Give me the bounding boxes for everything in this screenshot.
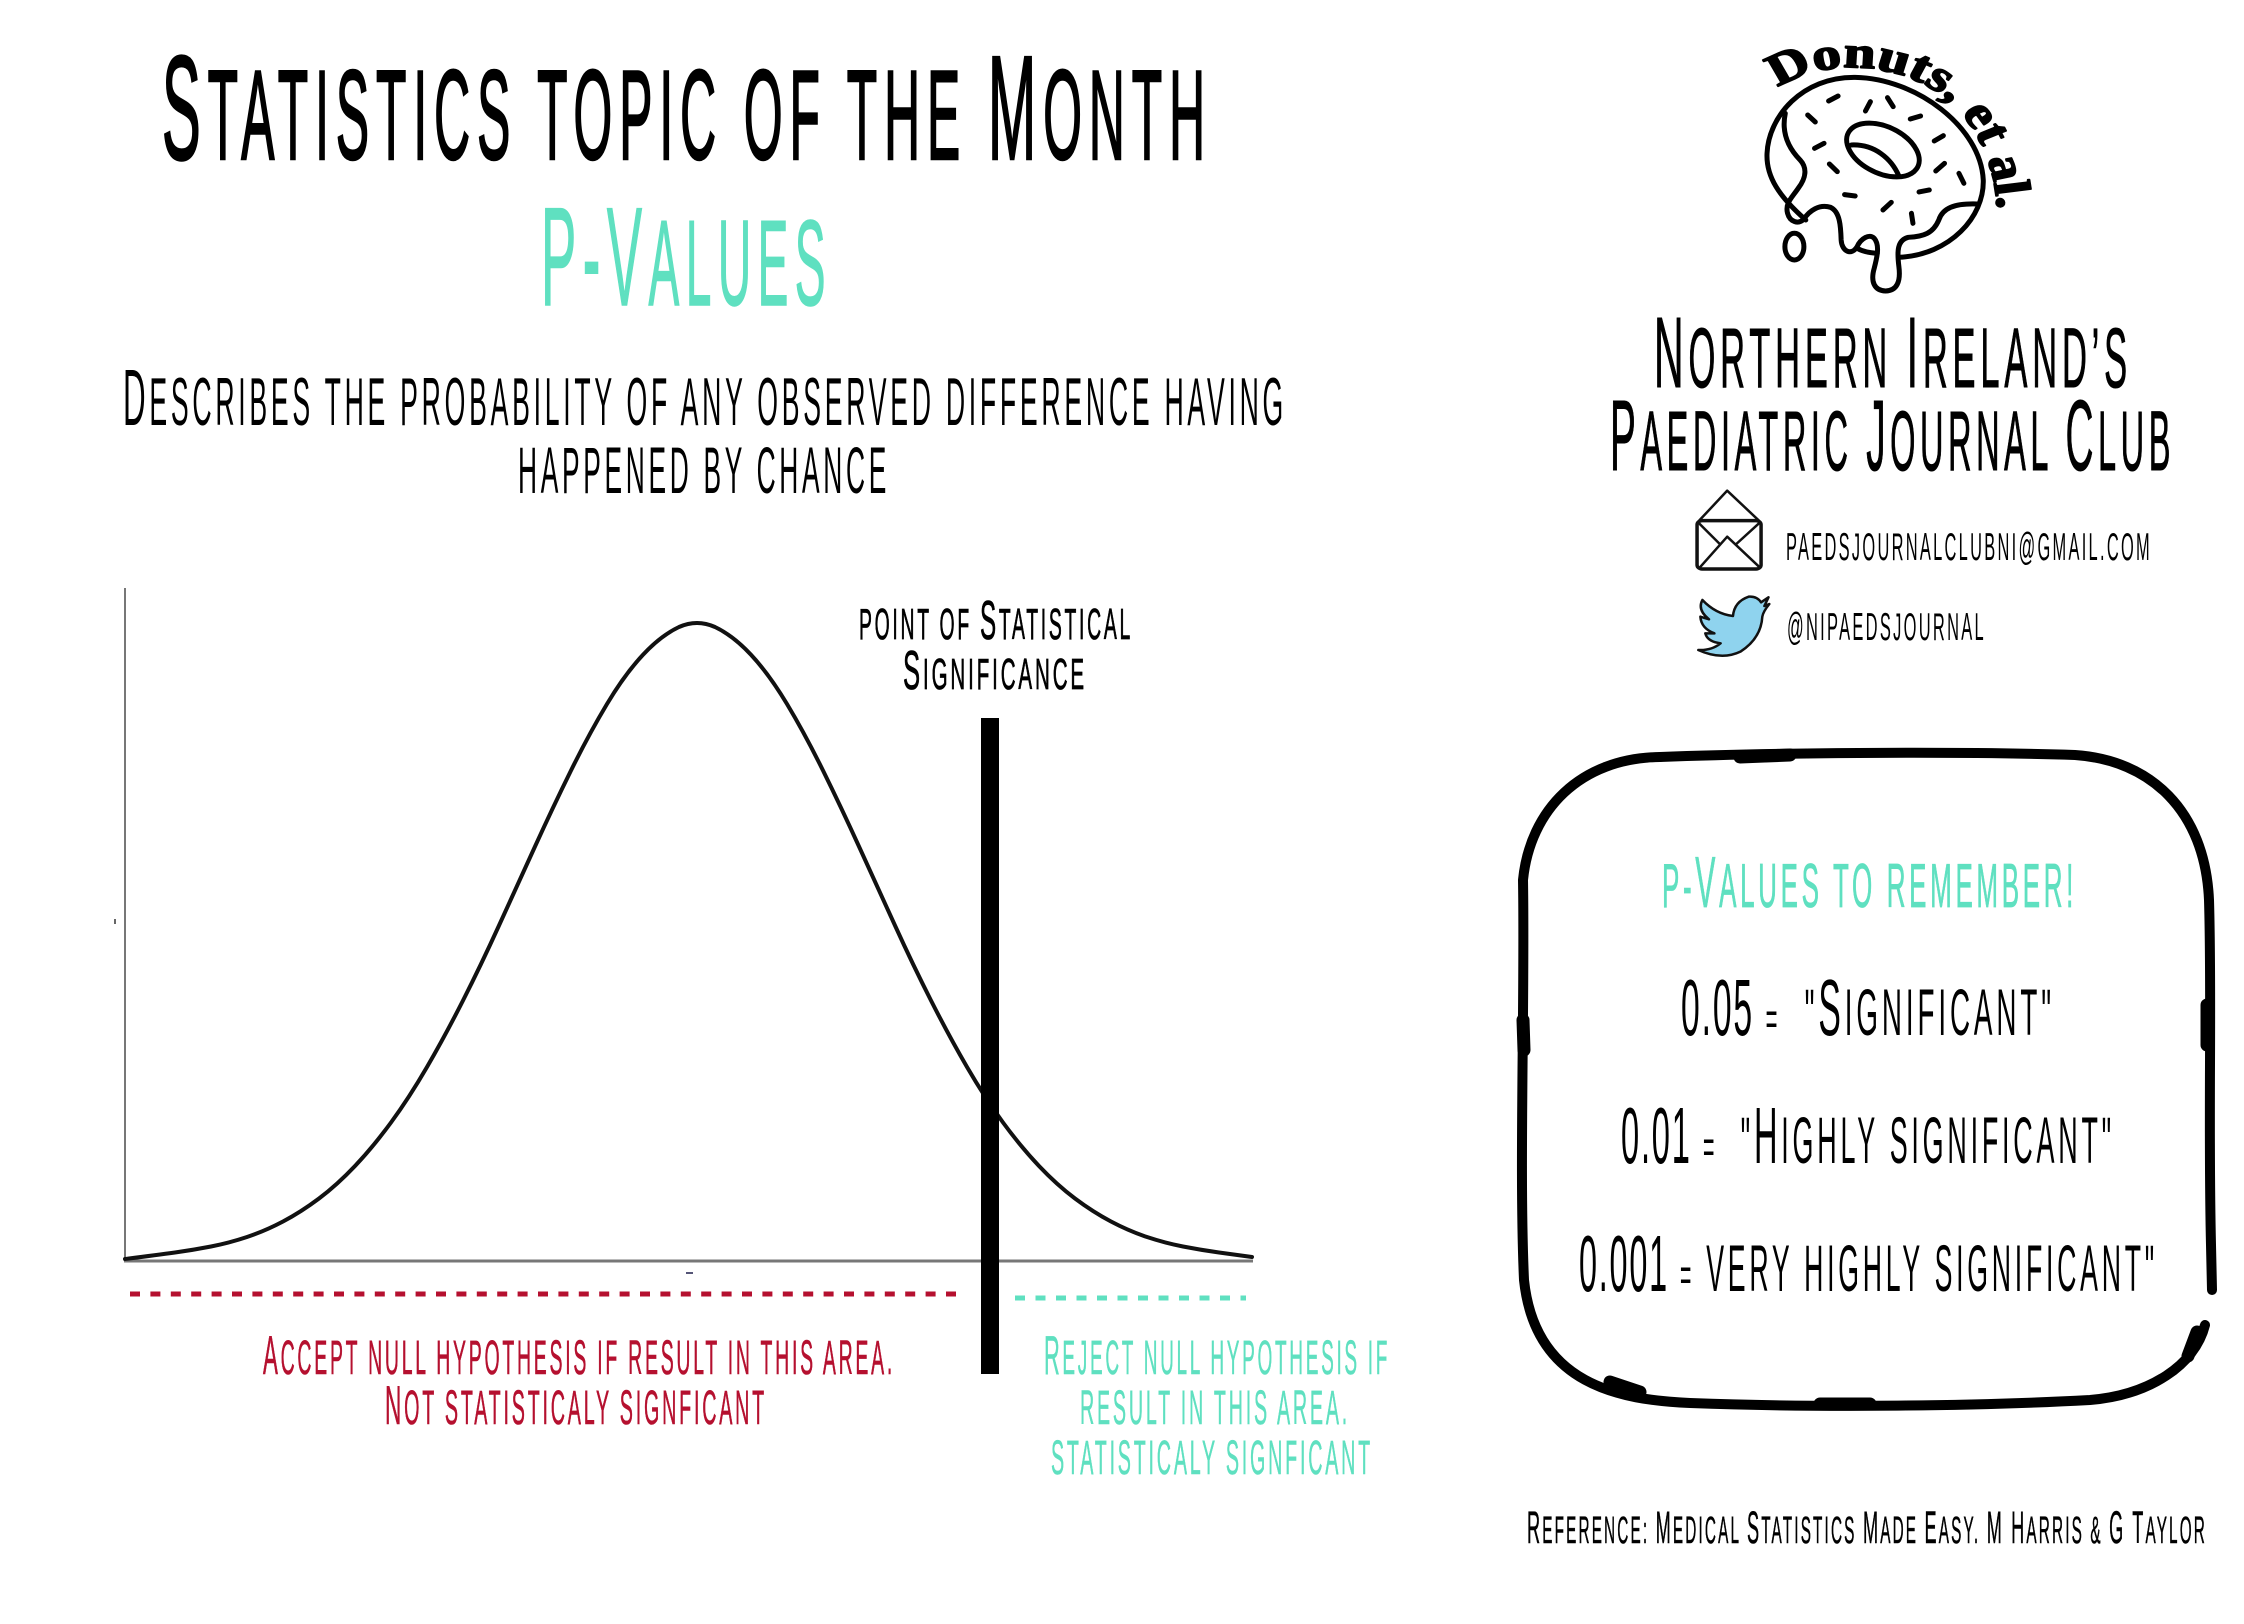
dashed line: acceptance region <box>130 1292 960 1296</box>
label: accept null hypothesis: NOT STATISTICALY SIGNFICANT <box>385 1374 767 1436</box>
text: P-VALUES <box>541 178 832 335</box>
chart: normal distribution curve: ACCEPT NULL HYPOTHESIS IF RESULT IN THIS AREA. <box>263 1324 895 1386</box>
logo drop <box>1785 233 1804 260</box>
label: point of statistical significance <box>859 589 1133 701</box>
logo: Donuts, et al. <box>1762 46 2032 294</box>
text block: definition <box>123 353 1287 507</box>
text: STATISTICALY SIGNFICANT <box>1051 1432 1373 1485</box>
bell curve <box>125 623 1252 1259</box>
title: STATISTICS TOPIC OF THE MONTH <box>162 26 1212 191</box>
panel: p-values to remember <box>1522 753 2212 1406</box>
label: point of statistical significance: SIGNIFICANCE <box>903 639 1087 701</box>
text: REJECT NULL HYPOTHESIS IF <box>1044 1324 1390 1386</box>
label: point of statistical significance: POINT OF STATISTICAL <box>859 589 1133 651</box>
logo donut hole <box>1835 112 1930 188</box>
heading: Northern Ireland's Paediatric Journal Club <box>1610 297 2175 492</box>
significance threshold bar <box>981 718 999 1374</box>
logo text: Donuts, et al. <box>1762 46 2032 208</box>
icon: envelope <box>1697 491 1761 569</box>
icon: twitter bird <box>1698 597 1769 656</box>
chart: normal distribution curve <box>114 588 1390 1485</box>
logo arc path <box>1778 67 1998 217</box>
logo donut outline <box>1767 77 1983 257</box>
logo glaze with drips <box>1784 113 1977 291</box>
label: reject null hypothesis <box>1044 1324 1390 1485</box>
label: accept null hypothesis <box>263 1324 895 1436</box>
text: RESULT IN THIS AREA. <box>1080 1382 1350 1435</box>
panel hand-drawn border <box>1522 753 2212 1406</box>
chart axes <box>114 588 1253 1274</box>
text block: definition: HAPPENED BY CHANCE <box>518 433 890 507</box>
dashed line: rejection region <box>1015 1296 1246 1300</box>
logo sprinkles <box>1808 96 1964 223</box>
